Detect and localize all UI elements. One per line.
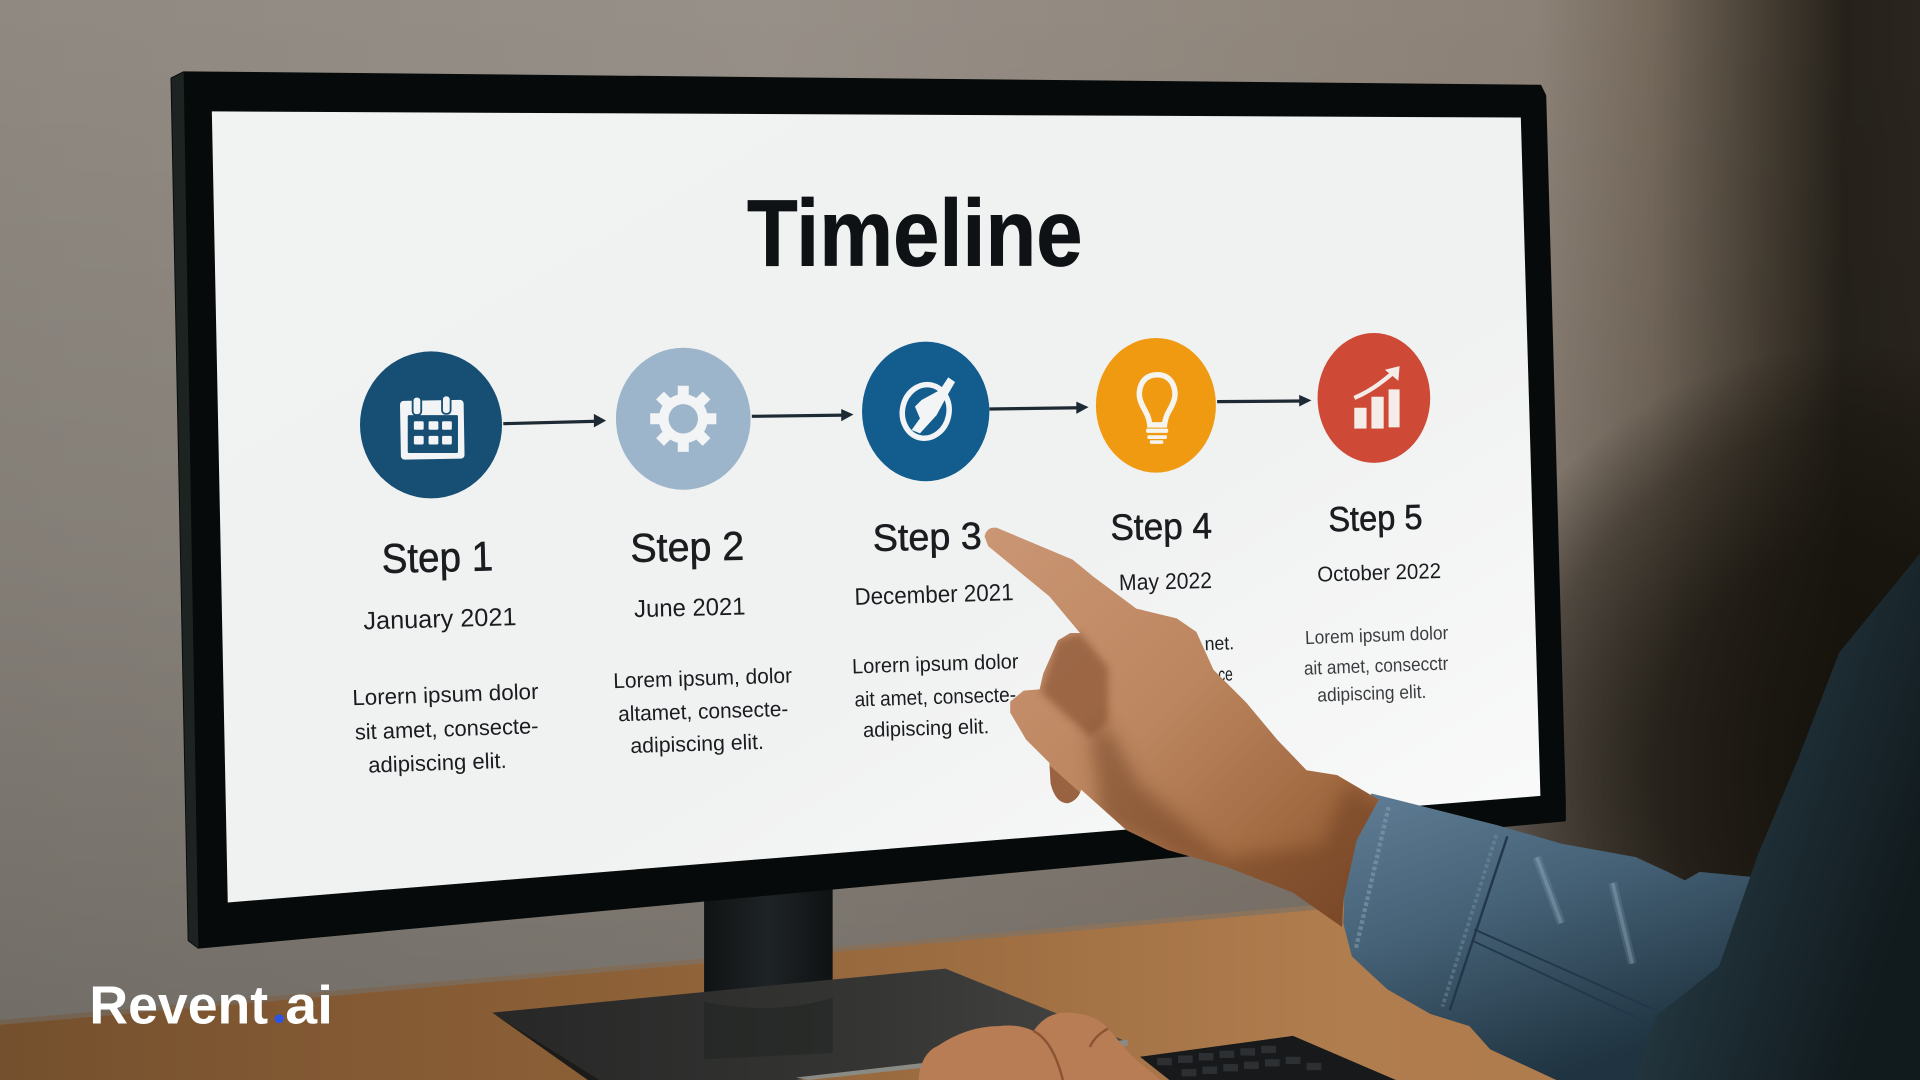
step 3 description: Lorern ipsum dolor bbox=[852, 650, 1019, 678]
step 2: June 2021 bbox=[613, 348, 853, 758]
step 4 description (mostly hidden by the hand): net. bbox=[1204, 633, 1234, 655]
step 5 heading: Step 5 bbox=[1328, 498, 1423, 539]
step 2 description: Lorem ipsum, dolor bbox=[613, 664, 792, 693]
step 1 description bbox=[352, 679, 539, 778]
logo: Revent.ai: ai bbox=[285, 976, 333, 1036]
step 4 description (mostly hidden by the hand) bbox=[1204, 633, 1234, 686]
step 4 date: May 2022 bbox=[1119, 567, 1212, 595]
denim sleeve bbox=[1343, 793, 1763, 1080]
icon: rising bar chart in red circle bbox=[1318, 333, 1430, 463]
step 2 description: altamet, consecte- bbox=[618, 697, 789, 726]
arrow: step 2 to step 3 bbox=[752, 409, 853, 421]
step 1: January 2021 bbox=[352, 351, 606, 778]
monitor stand neck bbox=[704, 888, 833, 1008]
arrow: step 1 to step 2 bbox=[503, 414, 606, 427]
step 4: May 2022 bbox=[1096, 338, 1311, 686]
step 5 description: adipiscing elit. bbox=[1317, 682, 1427, 707]
monitor frame bbox=[171, 72, 1565, 948]
arrow: step 4 to step 5 bbox=[1217, 395, 1311, 407]
step 5 description: Lorem ipsum dolor bbox=[1305, 623, 1449, 649]
left hand on keyboard bbox=[918, 1013, 1161, 1080]
step 4 description (mostly hidden by the hand): ce bbox=[1218, 664, 1233, 686]
step 3 description bbox=[852, 650, 1019, 742]
keyboard bbox=[1140, 1036, 1396, 1080]
step 3 description: ait amet, consecte- bbox=[854, 683, 1016, 712]
step 3 heading: Step 3 bbox=[872, 516, 982, 560]
step 2 description bbox=[613, 664, 792, 758]
icon: compass in blue circle bbox=[862, 342, 989, 481]
wooden desk bbox=[0, 901, 1920, 1080]
step 5 description bbox=[1304, 623, 1449, 707]
step 2 heading: Step 2 bbox=[630, 523, 745, 571]
step 1 date: January 2021 bbox=[363, 603, 517, 635]
step 5 date: October 2022 bbox=[1317, 559, 1441, 587]
person's torso bbox=[1636, 553, 1920, 1080]
step 1 heading: Step 1 bbox=[381, 532, 494, 582]
step 1 description: Lorern ipsum dolor bbox=[352, 679, 539, 710]
step 2 date: June 2021 bbox=[634, 593, 746, 623]
monitor screen bbox=[212, 111, 1540, 902]
icon: calendar in navy circle bbox=[360, 351, 502, 498]
step 3 description: adipiscing elit. bbox=[863, 715, 989, 742]
step 1 description: adipiscing elit. bbox=[368, 748, 507, 778]
icon: light bulb in amber circle bbox=[1096, 338, 1216, 473]
step 3 date: December 2021 bbox=[854, 579, 1014, 611]
step 5: October 2022 bbox=[1304, 333, 1449, 707]
step 3: December 2021 bbox=[852, 342, 1089, 742]
step 1 description: sit amet, consecte- bbox=[354, 713, 539, 745]
step 2 description: adipiscing elit. bbox=[630, 730, 764, 758]
pointing hand bbox=[984, 528, 1384, 943]
logo: Revent.ai: Revent bbox=[89, 976, 268, 1036]
arrow: step 3 to step 4 bbox=[989, 402, 1089, 414]
icon: gear in light blue circle bbox=[616, 348, 751, 490]
monitor stand base bbox=[492, 969, 1128, 1080]
step 4 heading: Step 4 bbox=[1110, 505, 1212, 548]
title: Timeline bbox=[747, 181, 1082, 286]
step 5 description: ait amet, consecctr bbox=[1304, 654, 1449, 680]
